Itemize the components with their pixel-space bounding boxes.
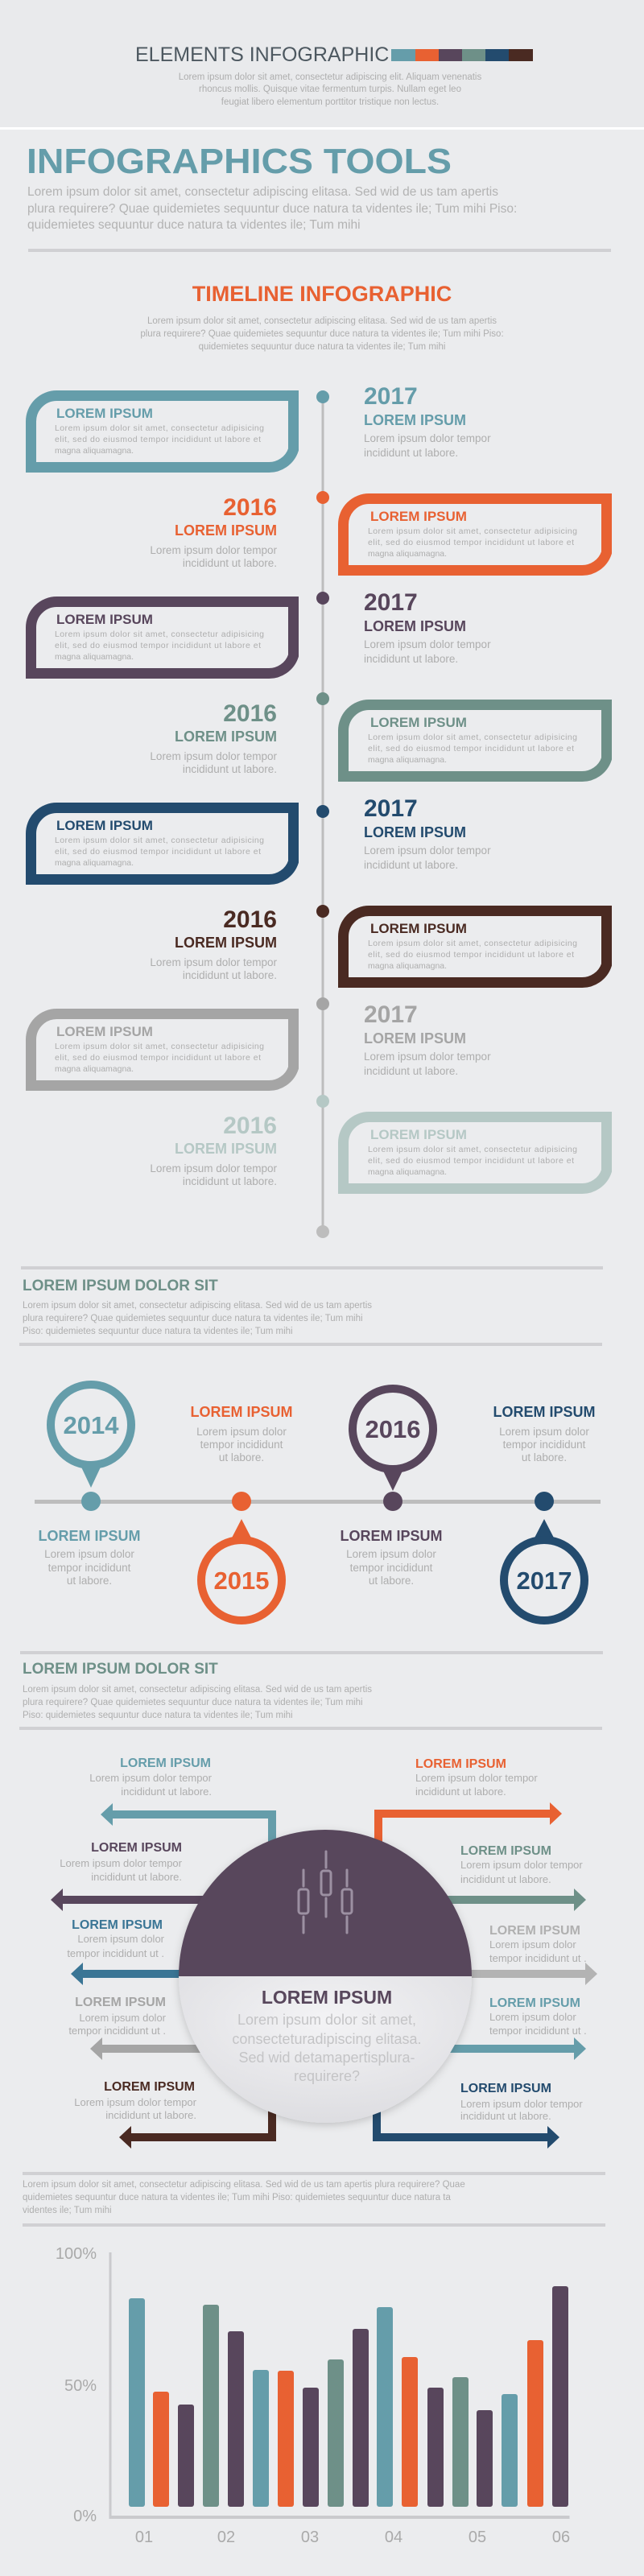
section 3 paragraph (23, 1685, 372, 1720)
label right 2 (460, 1844, 583, 1885)
timeline row 4: 2016 (223, 700, 277, 727)
label purple: Lorem ipsum dolor (346, 1548, 436, 1560)
timeline row 8: incididunt ut labore. (183, 1175, 277, 1187)
section 4 paragraph: videntes ile; Tum mihi (23, 2206, 112, 2215)
section 3 paragraph: Lorem ipsum dolor sit amet, consectetur adipiscing elitasa. Sed wid de us tam apertis (23, 1685, 372, 1695)
timeline heading: TIMELINE INFOGRAPHIC (192, 282, 452, 306)
label right 5: incididunt ut labore. (460, 2110, 551, 2122)
label navy: ut labore. (522, 1451, 567, 1463)
circle text: Sed wid detamapertisplura- (238, 2050, 415, 2066)
timeline row 2: LOREM IPSUM (175, 522, 277, 539)
intro paragraph (27, 185, 517, 232)
header title: ELEMENTS INFOGRAPHIC (135, 43, 389, 66)
timeline row 2: elit, sed do eiusmod tempor incididunt ut labore et (368, 538, 574, 547)
arrow: purple left (51, 1889, 213, 1911)
label right 2: LOREM IPSUM (460, 1844, 551, 1858)
section 4 paragraph (23, 2180, 465, 2215)
label right 4: LOREM IPSUM (489, 1996, 580, 2010)
label teal (38, 1528, 141, 1587)
timeline row 6 (150, 906, 607, 983)
label right 4: Lorem ipsum dolor (489, 2011, 576, 2023)
header (135, 43, 533, 107)
x axis labels: 02 (217, 2529, 235, 2546)
circle text: LOREM IPSUM (262, 1987, 392, 2008)
label right 2: Lorem ipsum dolor tempor (460, 1859, 583, 1871)
circle text: consecteturadipiscing elitasa. (232, 2031, 422, 2047)
label left 5: incididunt ut labore. (105, 2109, 196, 2121)
timeline row 6: LOREM IPSUM (370, 921, 467, 936)
label right 3: LOREM IPSUM (489, 1924, 580, 1938)
arrow: green right (435, 1889, 586, 1911)
label left 4: Lorem ipsum dolor (79, 2012, 167, 2024)
label right 2: incididunt ut labore. (460, 1873, 551, 1885)
y axis labels (56, 2245, 97, 2525)
label right 5: Lorem ipsum dolor tempor (460, 2098, 583, 2110)
timeline row 1: LOREM IPSUM (364, 412, 466, 428)
timeline row 5: Lorem ipsum dolor tempor (364, 844, 491, 857)
label right 1 (415, 1757, 538, 1798)
timeline row 1: Lorem ipsum dolor sit amet, consectetur adipisicing (55, 423, 264, 433)
timeline row 6: LOREM IPSUM (175, 935, 277, 951)
header subtitle: Lorem ipsum dolor sit amet, consectetur adipiscing elit. Aliquam venenatis (179, 72, 481, 82)
label left 2: Lorem ipsum dolor tempor (60, 1857, 183, 1869)
timeline row 2: Lorem ipsum dolor tempor (150, 544, 277, 556)
timeline row 5: 2017 (364, 795, 418, 822)
timeline row 1: incididunt ut labore. (364, 447, 458, 459)
section 4 paragraph: Lorem ipsum dolor sit amet, consectetur adipiscing elitasa. Sed wid de us tam apertis plura requirere? Quae (23, 2180, 465, 2190)
horizontal timeline (35, 1492, 601, 1511)
label orange: Lorem ipsum dolor (196, 1426, 287, 1438)
timeline row 7: LOREM IPSUM (364, 1030, 466, 1046)
timeline row 3: Lorem ipsum dolor tempor (364, 638, 491, 650)
label left 3: Lorem ipsum dolor (77, 1933, 165, 1945)
main title: INFOGRAPHICS TOOLS (27, 142, 452, 181)
x axis labels: 04 (385, 2529, 402, 2546)
timeline row 7: LOREM IPSUM (56, 1024, 153, 1039)
label teal: tempor incididunt (48, 1562, 131, 1574)
timeline row 6: elit, sed do eiusmod tempor incididunt ut labore et (368, 950, 574, 960)
timeline row 4: elit, sed do eiusmod tempor incididunt ut labore et (368, 744, 574, 753)
x axis labels (135, 2529, 570, 2546)
section 2 paragraph: plura requirere? Quae quidemietes sequuntur duce natura ta videntes ile; Tum mihi (23, 1314, 363, 1323)
timeline row 4: LOREM IPSUM (175, 729, 277, 745)
timeline row 5: incididunt ut labore. (364, 859, 458, 871)
section 2 heading: LOREM IPSUM DOLOR SIT (23, 1278, 218, 1294)
label purple: ut labore. (369, 1575, 414, 1587)
pin 2017 (504, 1519, 584, 1620)
label orange: ut labore. (219, 1451, 264, 1463)
arrow: teal left top (101, 1803, 276, 1851)
header subtitle: rhoncus mollis. Quisque vitae fermentum turpis. Nullam eget leo (199, 85, 461, 94)
timeline row 3: 2017 (364, 589, 418, 616)
timeline row 3: magna aliquamagna. (55, 652, 134, 662)
label navy: tempor incididunt (503, 1439, 586, 1451)
label teal: Lorem ipsum dolor (44, 1548, 134, 1560)
timeline row 8 (150, 1113, 607, 1189)
timeline paragraph: quidemietes sequuntur duce natura ta videntes ile; Tum mihi (199, 342, 445, 352)
timeline row 1: Lorem ipsum dolor tempor (364, 432, 491, 444)
label left 5 (74, 2080, 197, 2121)
timeline row 5: magna aliquamagna. (55, 858, 134, 868)
central circle (179, 1830, 472, 2123)
timeline row 3: Lorem ipsum dolor sit amet, consectetur adipisicing (55, 630, 264, 639)
timeline row 4: magna aliquamagna. (368, 755, 447, 765)
timeline row 6: 2016 (223, 906, 277, 933)
x axis labels: 06 (552, 2529, 570, 2546)
circle text (232, 1987, 422, 2084)
arrow: blue left (71, 1963, 185, 1985)
timeline row 4: incididunt ut labore. (183, 763, 277, 775)
label navy (493, 1404, 596, 1463)
timeline row 2: LOREM IPSUM (370, 509, 467, 524)
timeline row 5: Lorem ipsum dolor sit amet, consectetur adipisicing (55, 836, 264, 845)
timeline row 7 (31, 1001, 491, 1086)
label purple: tempor incididunt (350, 1562, 433, 1574)
label left 3 (67, 1918, 165, 1959)
label left 5: Lorem ipsum dolor tempor (74, 2096, 197, 2108)
section 3 heading: LOREM IPSUM DOLOR SIT (23, 1661, 218, 1678)
timeline row 6: Lorem ipsum dolor tempor (150, 956, 277, 968)
circle text: Lorem ipsum dolor sit amet, (237, 2012, 416, 2028)
timeline row 7: incididunt ut labore. (364, 1065, 458, 1077)
arrow: teal right (435, 2037, 586, 2060)
label navy: LOREM IPSUM (493, 1404, 596, 1420)
pin 2017: 2017 (517, 1567, 572, 1595)
arrow: orange right top (374, 1802, 562, 1850)
label left 1 (89, 1757, 213, 1798)
x axis labels: 05 (469, 2529, 486, 2546)
pin 2016: 2016 (365, 1415, 420, 1443)
pin 2015 (201, 1519, 282, 1620)
timeline row 6: incididunt ut labore. (183, 969, 277, 981)
bar chart (56, 2245, 570, 2546)
label right 3: Lorem ipsum dolor (489, 1938, 576, 1951)
pin 2014 (51, 1385, 131, 1488)
timeline row 5: elit, sed do eiusmod tempor incididunt ut labore et (55, 847, 261, 857)
timeline paragraph (140, 316, 504, 352)
timeline row 8: Lorem ipsum dolor tempor (150, 1162, 277, 1174)
timeline row 5: LOREM IPSUM (56, 818, 153, 833)
label left 2 (60, 1841, 183, 1883)
timeline row 3: incididunt ut labore. (364, 653, 458, 665)
label right 1: Lorem ipsum dolor tempor (415, 1772, 538, 1784)
label left 3: LOREM IPSUM (72, 1918, 163, 1932)
label teal: LOREM IPSUM (38, 1528, 141, 1544)
label orange: LOREM IPSUM (190, 1404, 293, 1420)
label right 4: tempor incididunt ut . (489, 2025, 587, 2037)
timeline row 7: Lorem ipsum dolor sit amet, consectetur adipisicing (55, 1042, 264, 1051)
timeline row 8: LOREM IPSUM (175, 1141, 277, 1157)
color swatches (391, 49, 533, 61)
timeline row 2: 2016 (223, 494, 277, 521)
timeline row 8: elit, sed do eiusmod tempor incididunt ut labore et (368, 1156, 574, 1166)
section 4 paragraph: quidemietes sequuntur duce natura ta videntes ile; Tum mihi Piso: quidemietes sequuntur duce natura ta (23, 2193, 451, 2202)
bars (129, 2286, 568, 2507)
label orange (190, 1404, 293, 1463)
timeline row 8: 2016 (223, 1113, 277, 1139)
label teal: ut labore. (67, 1575, 112, 1587)
timeline row 6: magna aliquamagna. (368, 961, 447, 971)
intro paragraph: plura requirere? Quae quidemietes sequuntur duce natura ta videntes ile; Tum mihi Piso: (27, 202, 517, 216)
timeline row 4: LOREM IPSUM (370, 715, 467, 730)
x axis labels: 03 (301, 2529, 319, 2546)
label left 3: tempor incididunt ut . (67, 1947, 164, 1959)
timeline row 2: Lorem ipsum dolor sit amet, consectetur adipisicing (368, 526, 577, 536)
timeline row 7: Lorem ipsum dolor tempor (364, 1051, 491, 1063)
label left 4: tempor incididunt ut . (68, 2025, 166, 2037)
timeline row 1: magna aliquamagna. (55, 446, 134, 456)
pin 2014: 2014 (64, 1411, 119, 1439)
y axis labels: 0% (73, 2508, 97, 2525)
timeline row 1 (31, 383, 491, 468)
header subtitle: feugiat libero elementum porttitor tristique non lectus. (221, 97, 439, 107)
label left 2: incididunt ut labore. (91, 1871, 182, 1883)
label right 1: incididunt ut labore. (415, 1785, 506, 1798)
arrow: navy right bottom (373, 2093, 559, 2149)
timeline row 2 (150, 494, 607, 571)
label purple (340, 1528, 443, 1587)
arrow: gray right (459, 1963, 597, 1985)
label navy: Lorem ipsum dolor (499, 1426, 589, 1438)
icon: sliders (299, 1852, 352, 1933)
section 2 paragraph: Piso: quidemietes sequuntur duce natura ta videntes ile; Tum mihi (23, 1327, 293, 1336)
timeline row 2: magna aliquamagna. (368, 549, 447, 559)
timeline row 7: elit, sed do eiusmod tempor incididunt ut labore et (55, 1053, 261, 1063)
pin 2015: 2015 (214, 1567, 269, 1595)
pin 2016 (353, 1389, 433, 1491)
timeline row 1: 2017 (364, 383, 418, 410)
timeline row 3: LOREM IPSUM (56, 612, 153, 627)
timeline row 2: incididunt ut labore. (183, 557, 277, 569)
timeline row 4: Lorem ipsum dolor sit amet, consectetur adipisicing (368, 733, 577, 742)
label right 1: LOREM IPSUM (415, 1757, 506, 1771)
timeline row 8: Lorem ipsum dolor sit amet, consectetur adipisicing (368, 1145, 577, 1154)
label right 4 (489, 1996, 587, 2037)
label orange: tempor incididunt (200, 1439, 283, 1451)
label right 3: tempor incididunt ut . (489, 1952, 587, 1964)
section 2 paragraph: Lorem ipsum dolor sit amet, consectetur adipiscing elitasa. Sed wid de us tam apertis (23, 1301, 372, 1311)
label left 1: LOREM IPSUM (120, 1757, 211, 1770)
circle text: requirere? (294, 2068, 360, 2084)
section 2 paragraph (23, 1301, 372, 1336)
label left 1: Lorem ipsum dolor tempor (89, 1772, 213, 1784)
timeline row 7: 2017 (364, 1001, 418, 1028)
intro paragraph: quidemietes sequuntur duce natura ta videntes ile; Tum mihi (27, 218, 361, 232)
y axis labels: 50% (64, 2377, 97, 2395)
timeline row 7: magna aliquamagna. (55, 1064, 134, 1074)
timeline row 4 (150, 700, 607, 777)
label right 5 (460, 2082, 583, 2122)
y axis labels: 100% (56, 2245, 97, 2263)
label left 5: LOREM IPSUM (104, 2080, 195, 2094)
header subtitle (179, 72, 481, 107)
label left 2: LOREM IPSUM (91, 1841, 182, 1855)
timeline row 3 (31, 589, 491, 674)
vertical timeline (316, 390, 329, 1238)
timeline row 3: elit, sed do eiusmod tempor incididunt ut labore et (55, 641, 261, 650)
timeline row 1: elit, sed do eiusmod tempor incididunt ut labore et (55, 435, 261, 444)
timeline row 3: LOREM IPSUM (364, 618, 466, 634)
timeline row 8: LOREM IPSUM (370, 1127, 467, 1142)
x axis labels: 01 (135, 2529, 153, 2546)
section 3 paragraph: plura requirere? Quae quidemietes sequuntur duce natura ta videntes ile; Tum mihi (23, 1698, 363, 1707)
label left 1: incididunt ut labore. (121, 1785, 212, 1798)
arrow: gray left (90, 2037, 204, 2060)
label left 4: LOREM IPSUM (75, 1996, 166, 2009)
timeline row 4: Lorem ipsum dolor tempor (150, 750, 277, 762)
intro paragraph: Lorem ipsum dolor sit amet, consectetur adipiscing elitasa. Sed wid de us tam apertis (27, 185, 498, 199)
label left 4 (68, 1996, 167, 2037)
timeline row 8: magna aliquamagna. (368, 1167, 447, 1177)
label purple: LOREM IPSUM (340, 1528, 443, 1544)
timeline row 5: LOREM IPSUM (364, 824, 466, 840)
arrow: brown left bottom (119, 2093, 276, 2149)
section 3 paragraph: Piso: quidemietes sequuntur duce natura ta videntes ile; Tum mihi (23, 1711, 293, 1720)
timeline paragraph: plura requirere? Quae quidemietes sequuntur duce natura ta videntes ile; Tum mihi Piso: (140, 329, 504, 339)
label right 3 (489, 1924, 587, 1964)
timeline row 1: LOREM IPSUM (56, 406, 153, 421)
label right 5: LOREM IPSUM (460, 2082, 551, 2095)
timeline row 5 (31, 795, 491, 880)
timeline row 6: Lorem ipsum dolor sit amet, consectetur adipisicing (368, 939, 577, 948)
timeline paragraph: Lorem ipsum dolor sit amet, consectetur adipiscing elitasa. Sed wid de us tam apertis (147, 316, 497, 326)
